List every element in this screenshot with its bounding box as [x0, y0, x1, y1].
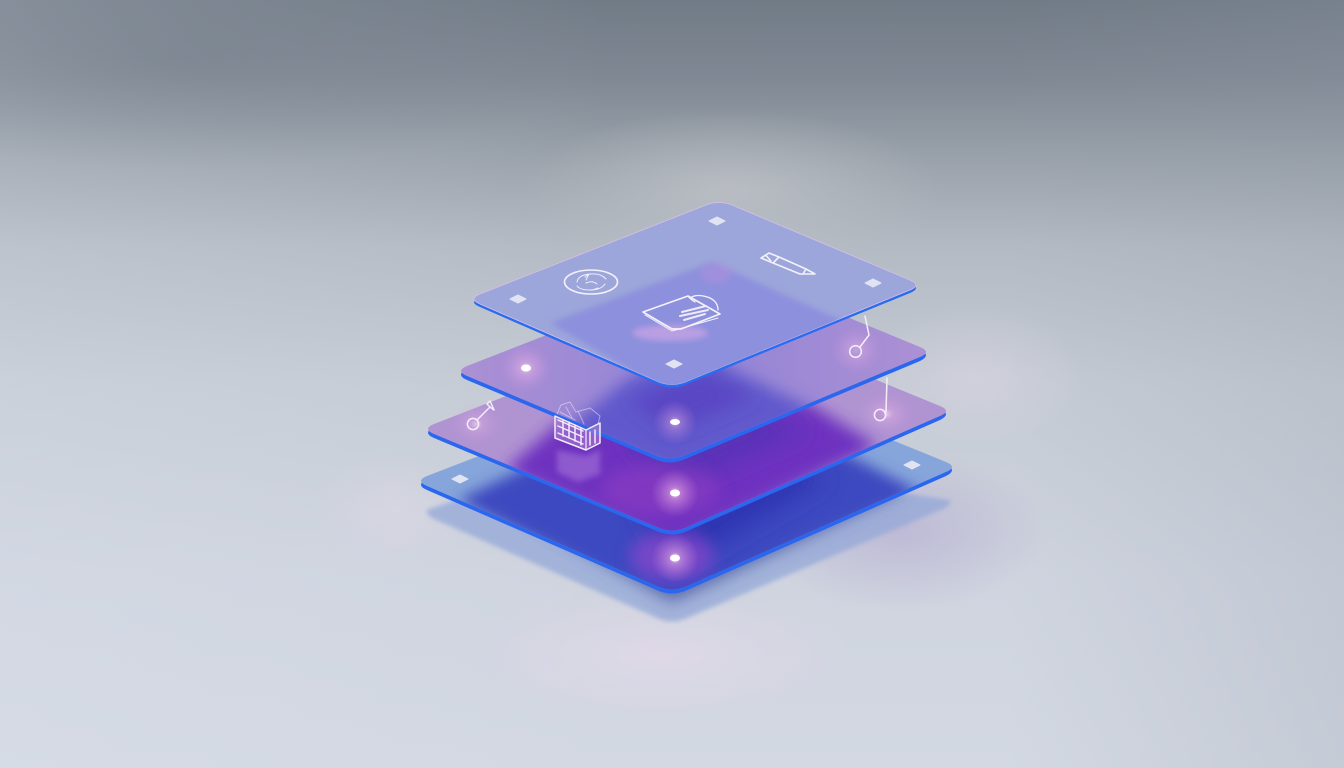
icon: document with tag	[643, 296, 720, 331]
icon: right node connector	[874, 378, 887, 421]
layer 4: bottom plate	[421, 440, 952, 594]
glow dot	[651, 469, 699, 517]
square marker	[904, 461, 920, 469]
square marker	[709, 217, 725, 225]
square marker	[510, 295, 526, 303]
icon: pencil	[761, 253, 815, 274]
square marker	[666, 360, 682, 368]
square marker	[452, 475, 468, 483]
layer 3	[428, 377, 946, 534]
icon: circular arrows badge	[564, 270, 618, 294]
glow dot	[500, 344, 552, 392]
icon: left node connector	[467, 401, 494, 430]
glow behind right node	[858, 392, 914, 436]
ground shadow plate	[427, 440, 950, 622]
glow dot	[651, 534, 699, 582]
icon: upper right node connector	[850, 316, 869, 357]
glow dot	[653, 400, 697, 444]
square marker	[865, 279, 881, 287]
layer 2	[461, 315, 926, 462]
icon reflection: basket	[557, 450, 600, 482]
icon: basket	[555, 402, 600, 450]
glow behind right node	[830, 326, 882, 374]
glow behind left node	[450, 402, 502, 446]
layer 1: top plate	[474, 202, 916, 395]
